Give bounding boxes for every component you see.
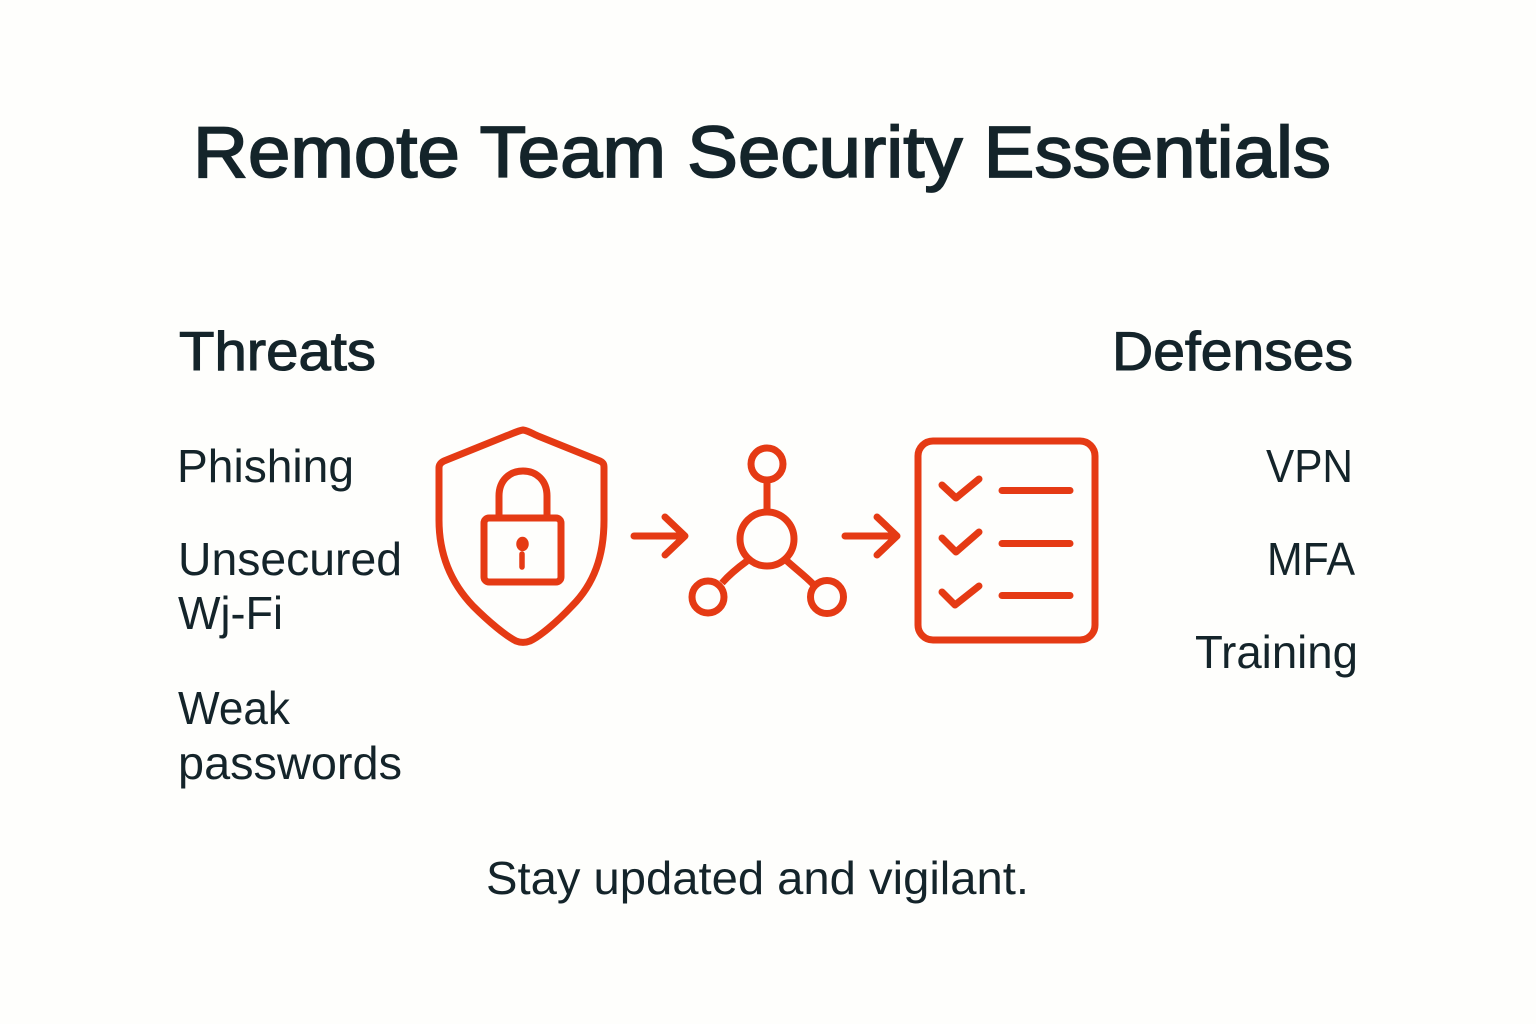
footer message: Stay updated and vigilant.: [486, 852, 1029, 904]
checklist row 1: [942, 479, 1070, 498]
threat: weak passwords: passwords: [178, 737, 402, 789]
title: Remote Team Security Essentials: [193, 113, 1331, 193]
arrow: shield to network: [634, 517, 685, 555]
threat: unsecured wi-fi: [178, 533, 402, 639]
arrow: network to checklist: [845, 517, 897, 555]
panel: defenses: [1112, 320, 1358, 678]
defense: vpn: VPN: [1266, 440, 1353, 492]
defense: training: Training: [1195, 626, 1358, 678]
checklist row 2: [942, 532, 1070, 552]
threat: weak passwords: Weak: [178, 682, 291, 734]
heading: defenses: Defenses: [1112, 320, 1353, 382]
threat: phishing: Phishing: [177, 440, 354, 492]
threat: weak passwords: [178, 682, 402, 789]
defense: mfa: MFA: [1267, 533, 1355, 585]
heading: threats: Threats: [179, 320, 376, 382]
panel: threats: [177, 320, 402, 789]
icon: shield with padlock: [439, 430, 604, 642]
threat: unsecured wi-fi: Wj-Fi: [178, 587, 283, 639]
checklist row 3: [942, 586, 1070, 605]
icon: network nodes: [692, 448, 844, 614]
icon: checklist: [918, 441, 1095, 640]
threat: unsecured wi-fi: Unsecured: [178, 533, 402, 585]
